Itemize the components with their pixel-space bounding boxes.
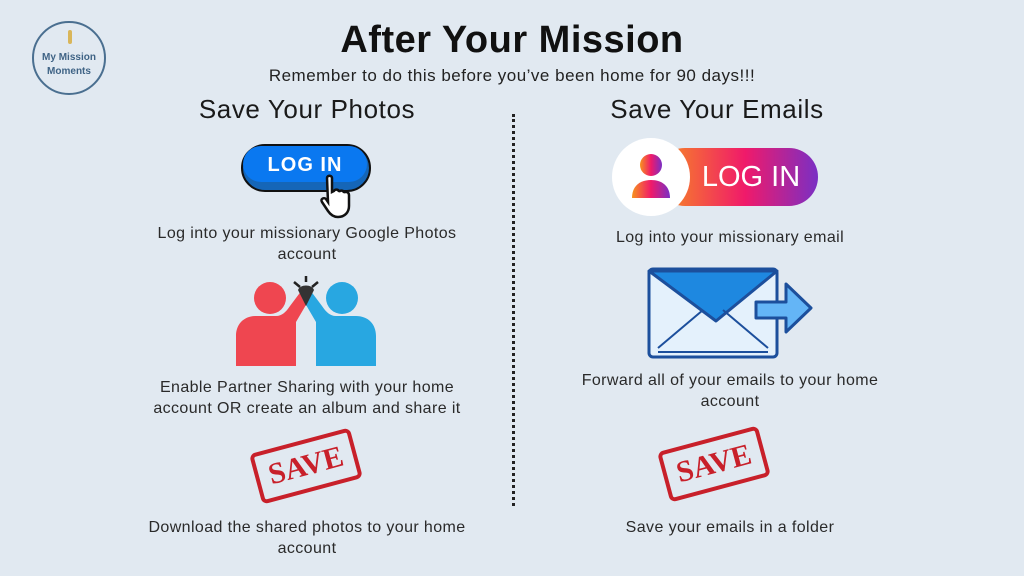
text: email step 2: [582, 372, 878, 410]
icon: angel statue: [68, 30, 72, 44]
text: photos step 1: [158, 225, 456, 263]
title: After Your Mission: [340, 19, 684, 61]
icon: save stamp left: SAVE: [265, 440, 347, 491]
text: email step 2: account: [701, 393, 759, 410]
text: photos step 2: account OR create an album and share it: [153, 400, 461, 417]
icon: envelope forward: [647, 268, 813, 358]
text: photos step 1: Log into your missionary Google Photos: [158, 225, 456, 242]
divider dotted: [512, 114, 515, 506]
text: photos step 1: account: [278, 246, 336, 263]
icon: save stamp left: [249, 427, 363, 505]
icon: save stamp right: SAVE: [673, 438, 755, 489]
icon: blue login button: [241, 144, 371, 218]
heading: photos: Save Your Photos: [199, 94, 415, 124]
text: photos step 2: Enable Partner Sharing with your home: [160, 379, 454, 396]
icon: user: [632, 154, 670, 198]
text: photos step 3: account: [278, 540, 336, 557]
text: email step 1: Log into your missionary email: [616, 229, 844, 246]
logo: [32, 21, 106, 95]
text: photos step 2: [153, 379, 461, 417]
icon: hand cursor: [320, 174, 350, 218]
text: email step 2: Forward all of your emails to your home: [582, 372, 878, 389]
icon: save stamp right: [657, 425, 771, 503]
logo text: [42, 52, 96, 77]
logo text: My Mission: [42, 52, 96, 63]
icon: blue login button: LOG IN: [268, 154, 342, 176]
logo text: Moments: [47, 66, 91, 77]
text: email step 3: Save your emails in a folder: [626, 519, 834, 536]
text: photos step 3: [148, 519, 466, 557]
text: photos step 3: Download the shared photos to your home: [148, 519, 466, 536]
heading: emails: Save Your Emails: [610, 94, 824, 124]
icon: high five: [236, 276, 376, 366]
subtitle: Remember to do this before you’ve been home for 90 days!!!: [269, 66, 755, 85]
icon: gradient login: [612, 138, 818, 216]
icon: gradient login: LOG IN: [702, 161, 800, 193]
